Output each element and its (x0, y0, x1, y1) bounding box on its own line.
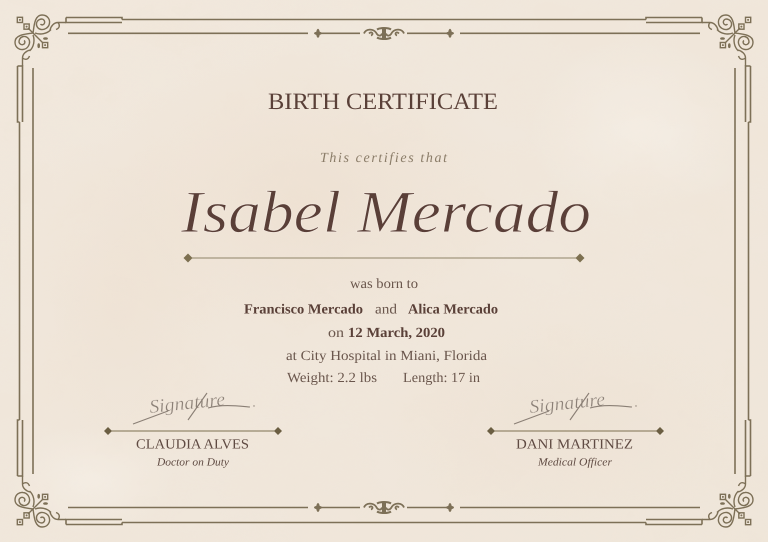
details text block (244, 277, 498, 386)
bottom centre flourish (364, 502, 404, 514)
bottom divider studs (314, 503, 454, 512)
signature (133, 389, 255, 424)
subtitle: This certifies that (320, 151, 448, 166)
signature: Signature (528, 389, 606, 418)
date line: 12 March, 2020 (348, 326, 445, 341)
title: BIRTH CERTIFICATE (268, 89, 498, 115)
signature line (104, 427, 282, 435)
corner ornament: top left (15, 15, 122, 122)
parents line: and (375, 302, 397, 318)
parents line: Alica Mercado (408, 302, 498, 318)
parents line (244, 302, 498, 318)
signature line (487, 427, 664, 435)
measurements line (287, 371, 480, 386)
signatory: medical officer (487, 389, 664, 468)
name: DANI MARTINEZ (516, 438, 633, 452)
parents line: Francisco Mercado (244, 302, 363, 318)
measurements line: Weight: 2.2 lbs (287, 371, 377, 386)
recipient name: Isabel Mercado (180, 179, 591, 245)
signatory: doctor (104, 389, 282, 468)
role: Medical Officer (537, 456, 613, 468)
top divider studs (314, 29, 454, 38)
corner ornament: bottom right (646, 420, 753, 527)
date line: on (328, 326, 344, 341)
corner ornament: top right (646, 15, 753, 122)
signature (514, 389, 637, 424)
born to line: was born to (350, 277, 418, 292)
name: CLAUDIA ALVES (136, 438, 249, 452)
signature: Signature (148, 389, 226, 418)
corner ornament: bottom left (15, 420, 122, 527)
top centre flourish (364, 28, 404, 40)
name divider (184, 254, 584, 262)
measurements line: Length: 17 in (403, 371, 480, 386)
place line: at City Hospital in Miani, Florida (286, 349, 488, 364)
role: Doctor on Duty (156, 456, 229, 468)
